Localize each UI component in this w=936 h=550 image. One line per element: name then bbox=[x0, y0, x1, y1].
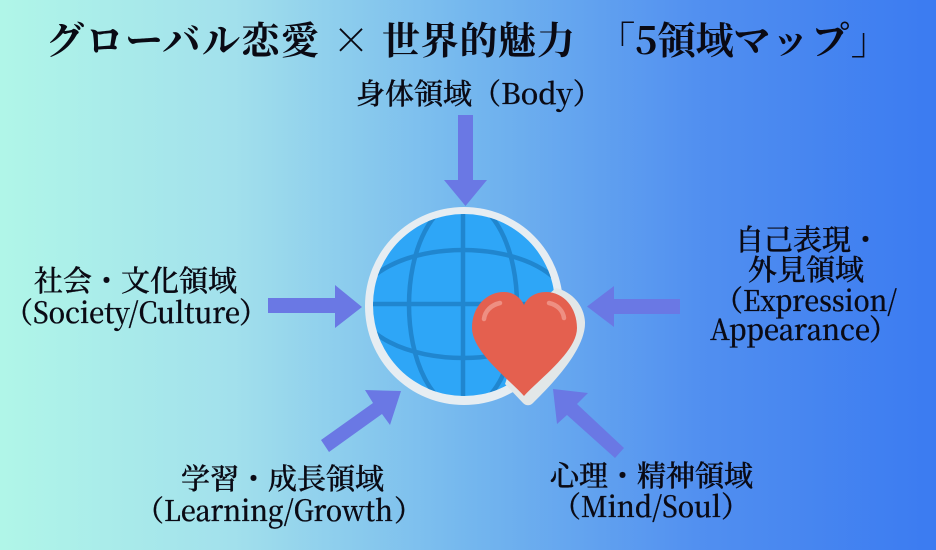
title: マップ」 bbox=[733, 10, 889, 65]
icon: globe bbox=[359, 201, 567, 409]
arrow: learning and growth bbox=[321, 390, 401, 452]
arrow: expression and appearance bbox=[587, 286, 680, 327]
title: 「5領域 bbox=[597, 10, 734, 65]
label: mind and soul: Mind/Soul bbox=[581, 485, 721, 526]
label: expression and appearance: 自己表現・ bbox=[735, 218, 880, 259]
label: expression and appearance bbox=[710, 218, 898, 349]
label: expression and appearance: ） bbox=[869, 308, 898, 349]
label: society and culture: ） bbox=[239, 291, 268, 332]
label: mind and soul bbox=[550, 454, 753, 526]
label: learning and growth: 学習・成長領域 bbox=[181, 457, 384, 498]
label: society and culture: Society/Culture bbox=[33, 291, 240, 332]
label: learning and growth bbox=[135, 457, 423, 530]
label: learning and growth: Learning/Growth bbox=[164, 489, 393, 530]
title bbox=[46, 10, 889, 65]
title: グローバル恋愛 bbox=[46, 10, 319, 65]
arrow: body bbox=[444, 115, 487, 206]
label: mind and soul: ） bbox=[721, 485, 750, 526]
label: expression and appearance: Expression/ bbox=[743, 279, 897, 320]
label: body: 身体領域（Body） bbox=[356, 72, 602, 113]
label: expression and appearance: 外見領域 bbox=[748, 248, 864, 289]
arrow: mind and soul bbox=[553, 389, 624, 458]
label: learning and growth: （ bbox=[135, 489, 164, 530]
label: mind and soul: 心理・精神領域 bbox=[550, 454, 753, 495]
label: expression and appearance: （ bbox=[714, 279, 743, 320]
label: learning and growth: ） bbox=[394, 489, 423, 530]
label: expression and appearance: Appearance bbox=[710, 308, 870, 349]
label: society and culture: （ bbox=[4, 291, 33, 332]
label: mind and soul: （ bbox=[552, 485, 581, 526]
label: society and culture bbox=[4, 259, 268, 332]
title: × bbox=[332, 10, 370, 65]
icon: heart bbox=[472, 288, 585, 405]
title: 世界的魅力 bbox=[382, 10, 575, 65]
label: society and culture: 社会・文化領域 bbox=[34, 259, 237, 300]
arrow: society and culture bbox=[268, 285, 362, 328]
